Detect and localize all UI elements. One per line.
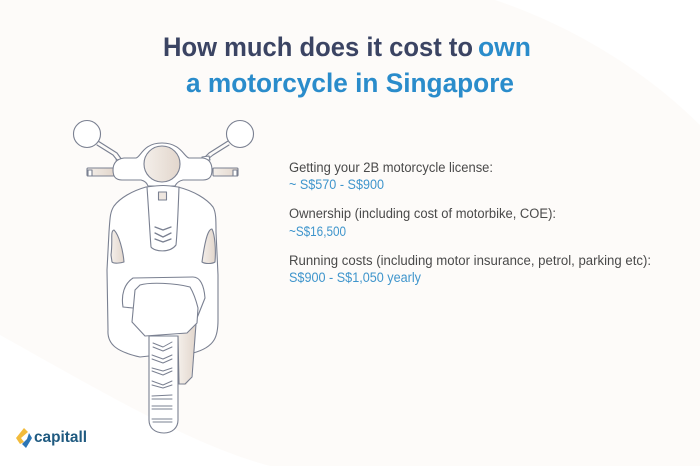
- running cost: [289, 253, 651, 285]
- right mirror: [202, 120, 254, 160]
- title: own: [478, 32, 531, 62]
- front body shield: [107, 186, 218, 357]
- front fender: [132, 283, 198, 336]
- badge: [158, 192, 166, 200]
- handlebar body: [113, 143, 212, 186]
- license cost: Getting your 2B motorcycle license:: [289, 160, 493, 175]
- left mirror: [74, 120, 125, 160]
- title: How much does it cost to: [163, 32, 473, 62]
- handlebar grips: [87, 168, 238, 176]
- ownership cost: Ownership (including cost of motorbike, COE):: [289, 206, 556, 221]
- motorcycle illustration: [74, 120, 254, 433]
- running cost: S$900 - S$1,050 yearly: [289, 270, 421, 285]
- capitall logo: [16, 428, 87, 448]
- chevrons: [155, 227, 171, 242]
- title: a motorcycle in Singapore: [186, 68, 514, 98]
- ownership cost: [289, 206, 556, 239]
- title: [163, 32, 531, 98]
- headlight: [144, 146, 180, 182]
- front wheel: [149, 336, 178, 433]
- seat shape back: [122, 277, 205, 318]
- side vents: [111, 230, 124, 263]
- license cost: ~ S$570 - S$900: [289, 177, 384, 192]
- logo mark: [16, 428, 32, 448]
- ownership cost: ~S$16,500: [289, 224, 346, 239]
- fender side tan: [178, 325, 196, 385]
- running cost: Running costs (including motor insurance, petrol, parking etc):: [289, 253, 651, 268]
- license cost: [289, 160, 493, 192]
- leg shield centre panel: [147, 187, 179, 251]
- cost list: [289, 160, 651, 285]
- capitall logo: capitall: [34, 429, 87, 446]
